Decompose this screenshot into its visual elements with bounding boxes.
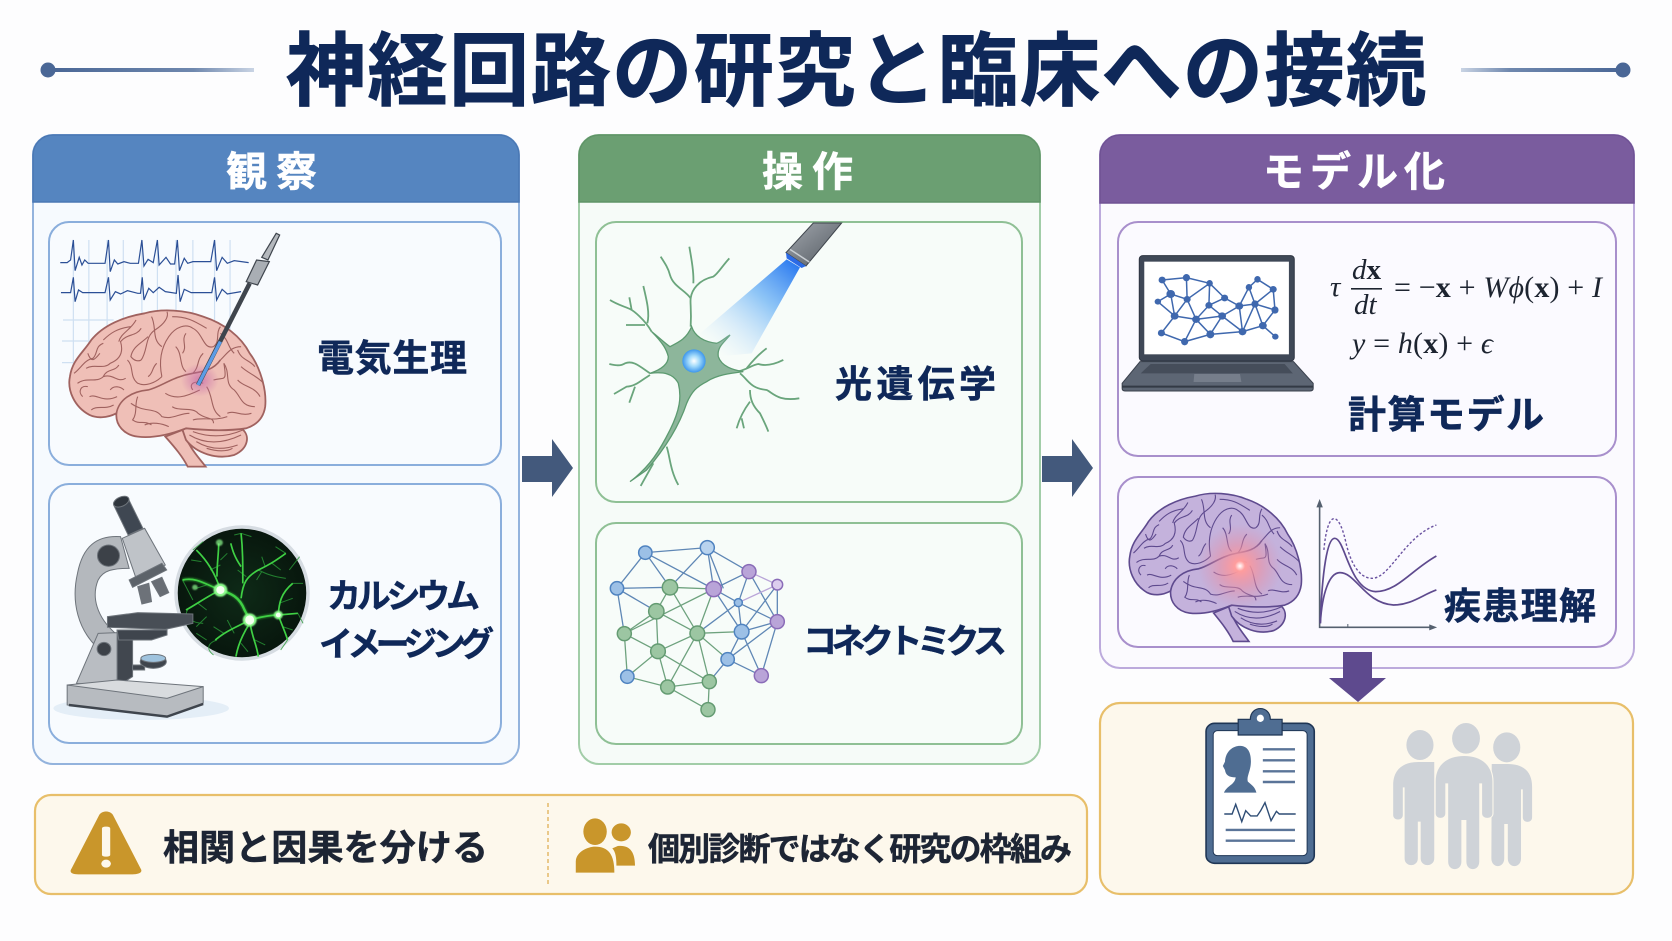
- card: 光遺伝学: [596, 222, 1022, 502]
- equation 1: dx: [1352, 254, 1382, 286]
- icon: purple brain with lesion: [1129, 493, 1301, 641]
- equation 1: τ: [1330, 271, 1342, 303]
- label: 光遺伝学: [835, 364, 996, 405]
- panel: 操作: [579, 135, 1040, 764]
- icon: connectome network: [610, 541, 784, 717]
- icon: clinical clipboard: [1206, 709, 1314, 863]
- card frame: [49, 222, 501, 465]
- label: 電気生理: [317, 338, 467, 379]
- card: 計算モデル: [1118, 222, 1616, 456]
- panel header: [579, 135, 1040, 202]
- header text: モデル化: [1263, 149, 1445, 195]
- equation 1: [1330, 254, 1604, 321]
- icon: people: [576, 818, 635, 873]
- card: 電気生理: [49, 222, 501, 467]
- card frame: [596, 222, 1022, 502]
- panel background: [579, 135, 1040, 764]
- panel background: [35, 795, 1087, 894]
- equation 1: = −x + Wϕ(x) + I: [1394, 271, 1604, 304]
- panel background: [1100, 135, 1634, 668]
- panel header: [1100, 135, 1634, 203]
- title text: 神経回路の研究と臨床への接続: [286, 27, 1426, 116]
- label: 疾患理解: [1444, 586, 1596, 627]
- icon: optical fiber: [786, 223, 842, 268]
- card: カルシウムイメージング: [49, 484, 501, 743]
- person left: [1393, 730, 1434, 865]
- label line 1: カルシウム: [327, 578, 480, 616]
- label: [319, 578, 494, 664]
- icon: electrode: [181, 233, 280, 397]
- title decoration: left line: [40, 62, 254, 78]
- icon: laptop with network: [1122, 256, 1313, 391]
- arrow: モデル化 to 臨床: [1329, 652, 1386, 702]
- card frame: [1118, 477, 1616, 647]
- panel: 観察: [33, 135, 519, 764]
- label: コネクトミクス: [803, 623, 1007, 661]
- label line 2: イメージング: [319, 626, 494, 664]
- title decoration: right line: [1461, 62, 1630, 78]
- header text: 操作: [762, 149, 853, 195]
- equations: [1330, 254, 1604, 360]
- person center: [1436, 723, 1492, 869]
- panel: モデル化: [1100, 135, 1634, 668]
- person right: [1491, 732, 1532, 866]
- label: 計算モデル: [1348, 394, 1544, 437]
- icon: neuron: [609, 247, 799, 486]
- icon: warning triangle: [71, 811, 141, 874]
- chart: disease trajectories: [1316, 499, 1437, 630]
- header text: 観察: [226, 149, 317, 195]
- panel: clinical connection: [1100, 703, 1633, 894]
- panel background: [33, 135, 519, 764]
- arrow: 操作 to モデル化: [1042, 439, 1093, 497]
- equation 2: y = h(x) + ϵ: [1349, 327, 1495, 360]
- icon: brain: [69, 310, 265, 467]
- icon: microscope: [53, 494, 229, 720]
- title: [40, 27, 1630, 116]
- panel header: [33, 135, 519, 202]
- icon: patient group: [1393, 723, 1532, 869]
- card: 疾患理解: [1118, 477, 1616, 647]
- card frame: [596, 523, 1022, 744]
- card frame: [1118, 222, 1616, 456]
- icon: light beam: [682, 259, 800, 373]
- icon: electrophysiology traces grid: [60, 240, 249, 367]
- equation 1: dt: [1354, 289, 1378, 321]
- icon: fluorescent neuron dish: [176, 527, 308, 659]
- divider: [547, 803, 549, 886]
- arrow: 観察 to 操作: [522, 439, 573, 497]
- panel: cautions: [35, 795, 1087, 894]
- caution text 1: 相関と因果を分ける: [163, 827, 488, 868]
- card frame: [49, 484, 501, 743]
- caution text 2: 個別診断ではなく研究の枠組み: [648, 831, 1072, 867]
- panel background: [1100, 703, 1633, 894]
- card: コネクトミクス: [596, 523, 1022, 744]
